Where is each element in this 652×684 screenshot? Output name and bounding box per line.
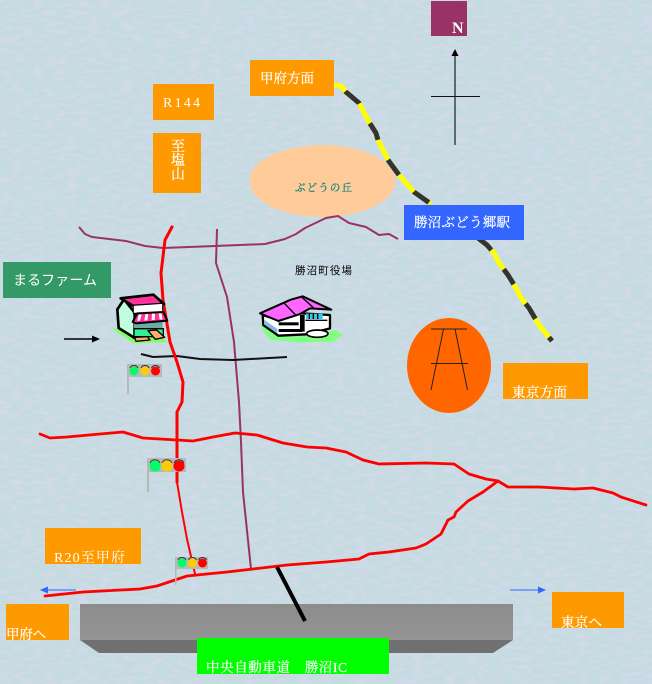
railway line xyxy=(334,85,552,341)
red roads xyxy=(40,227,646,596)
label: town hall: 勝沼町役場 xyxy=(295,264,352,277)
label: to Shiozan: 至 xyxy=(171,139,185,155)
traffic light 1 xyxy=(127,364,162,394)
purple roads xyxy=(79,216,398,569)
arrow: toward Tokyo xyxy=(510,586,546,594)
label: Kofu direction: 甲府方面 xyxy=(260,70,314,86)
north label xyxy=(431,1,467,37)
label: Maru Farm: まるファーム xyxy=(13,272,97,288)
expressway slab xyxy=(80,604,513,653)
icon: town hall building xyxy=(258,296,343,342)
label: to Tokyo xyxy=(552,592,624,630)
compass: north arrow xyxy=(431,49,480,145)
label: Katsunuma Budokyo station: 勝沼ぶどう郷駅 xyxy=(414,215,510,230)
label: Kofu direction xyxy=(250,60,334,96)
label: Tokyo direction xyxy=(503,363,588,400)
label: R144: R144 xyxy=(163,96,200,111)
label: to Shiozan: 山 xyxy=(171,167,185,183)
hill: Budou no Oka xyxy=(250,145,396,217)
label: Maru Farm xyxy=(3,262,111,298)
black local road xyxy=(141,354,287,360)
label: Chuo Expressway Katsunuma IC: 中央自動車道 勝沼IC xyxy=(206,659,347,675)
icon: farm shop xyxy=(112,295,168,343)
label: to Shiozan: 塩 xyxy=(171,153,185,169)
label: R144 xyxy=(153,84,214,120)
arrow to farm xyxy=(64,336,100,342)
hill: Budou no Oka: ぶどうの丘 xyxy=(295,182,352,194)
label: Chuo Expressway Katsunuma IC xyxy=(197,638,389,675)
label: to Kofu: 甲府へ xyxy=(6,626,46,642)
north label: N xyxy=(452,20,464,37)
label: to Kofu xyxy=(6,604,69,642)
label: to Tokyo: 東京へ xyxy=(561,614,602,630)
interchange access road xyxy=(277,567,305,621)
traffic light 2 xyxy=(147,458,186,492)
label: Tokyo direction: 東京方面 xyxy=(512,384,567,400)
traffic light 3 xyxy=(175,557,208,585)
label: to Shiozan xyxy=(153,133,201,193)
label: R20 to Kofu: R20至甲府 xyxy=(54,549,125,566)
symbol: station / tower circle xyxy=(407,318,491,413)
label: Katsunuma Budokyo station xyxy=(404,205,524,240)
arrow: toward Kofu xyxy=(40,586,76,594)
label: R20 to Kofu xyxy=(45,528,141,566)
